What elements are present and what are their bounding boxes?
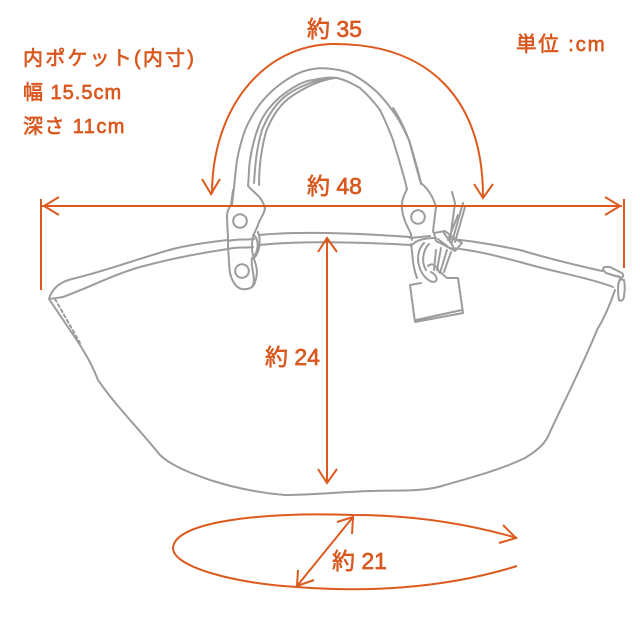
side stitching <box>55 299 80 343</box>
pocket width: 幅 15.5cm <box>23 81 122 104</box>
lock and key charm <box>410 272 463 322</box>
handle <box>232 68 436 207</box>
label: base depth: 約 21 <box>332 548 387 574</box>
left handle tab <box>227 190 265 289</box>
right handle tab <box>402 189 436 240</box>
zipper pull <box>603 267 625 301</box>
bag body outline <box>49 233 615 495</box>
dimension: base ellipse <box>173 514 517 589</box>
label: unit: 単位 :cm <box>516 33 607 56</box>
dimension: handle length arc <box>202 44 493 198</box>
pocket depth: 深さ 11cm <box>23 115 126 138</box>
label: width: 約 48 <box>307 173 362 199</box>
label: inner pocket <box>23 47 196 138</box>
label: handle length: 約 35 <box>307 16 362 42</box>
label: height: 約 24 <box>265 344 320 370</box>
bag illustration <box>49 68 625 495</box>
pocket heading: 内ポケット(内寸) <box>23 47 196 70</box>
dimension: height arrow <box>318 238 337 483</box>
dimension: width arrow <box>41 197 624 290</box>
